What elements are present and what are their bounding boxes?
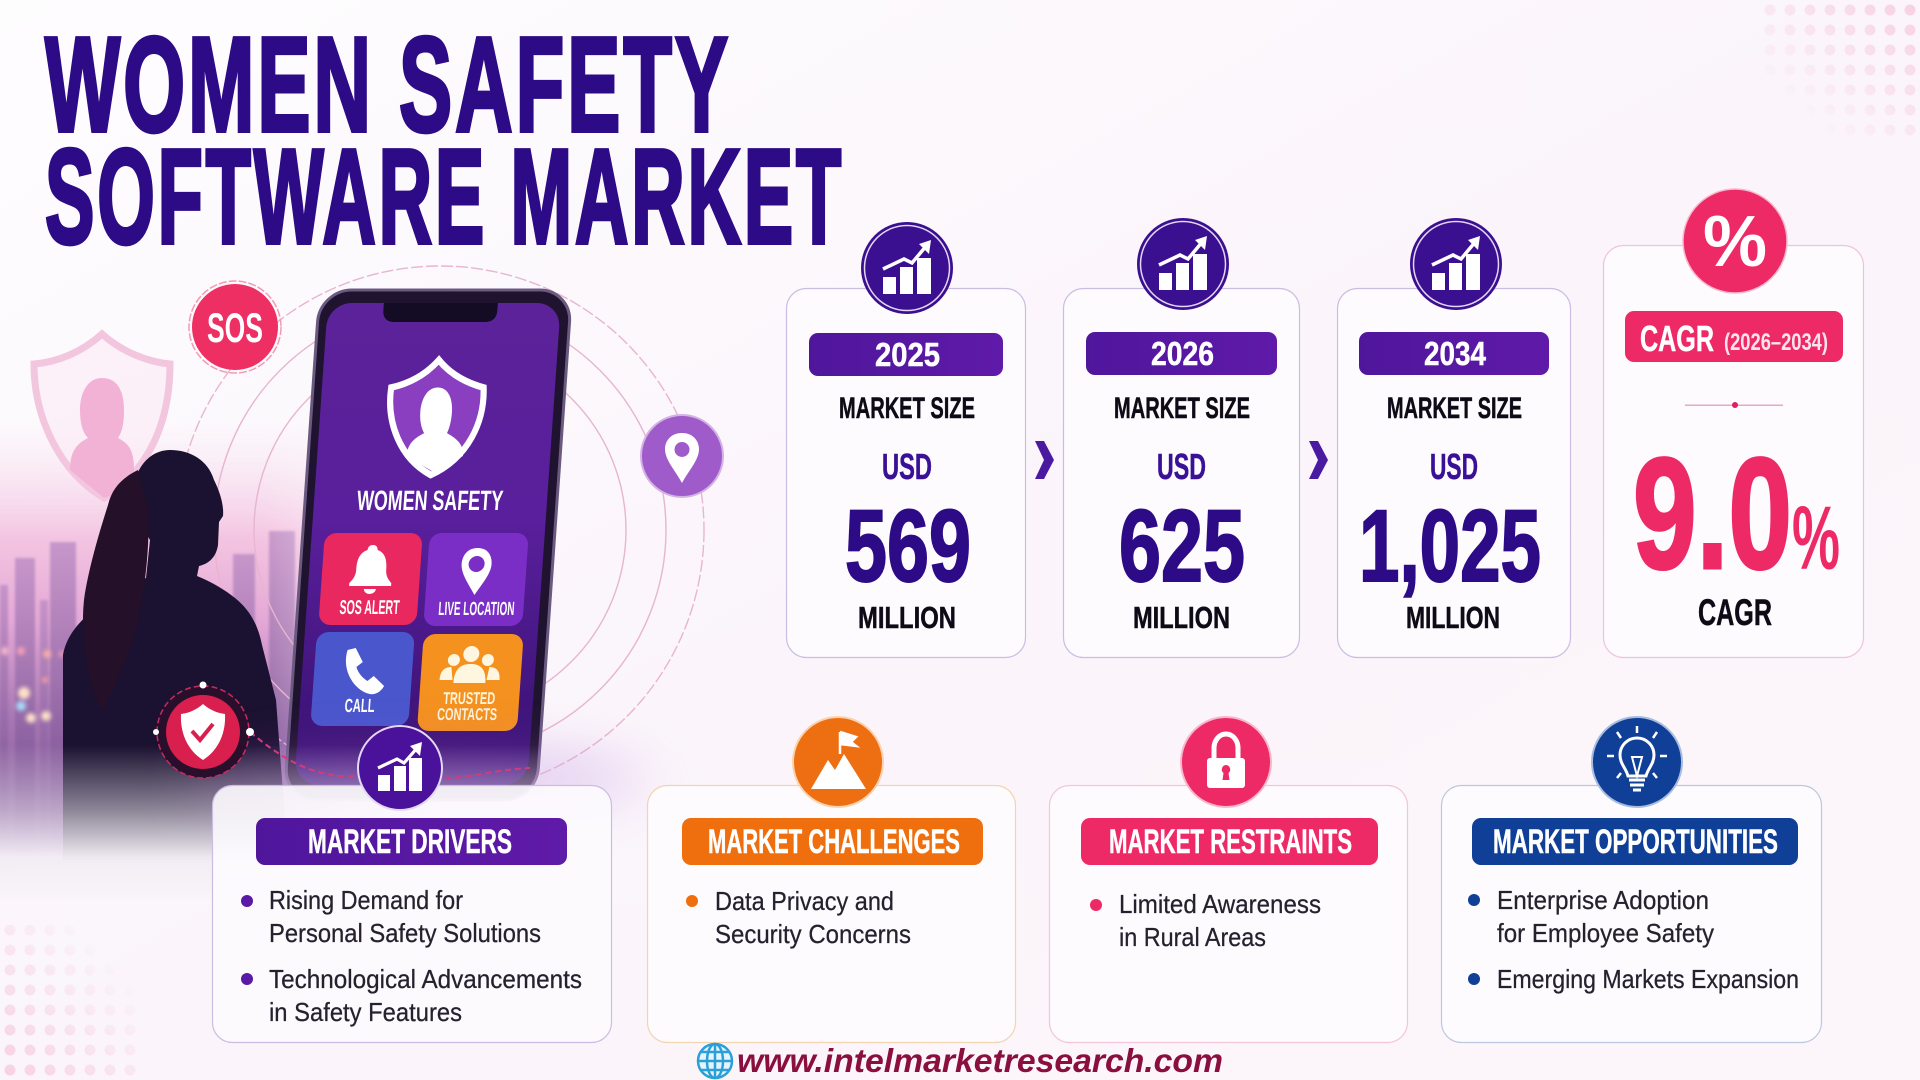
- icon: SOS badge: SOS: [207, 304, 263, 351]
- bullet 1: for Employee Safety: [1497, 918, 1714, 948]
- tile: call: [310, 632, 415, 726]
- bullet 1: Rising Demand for: [269, 885, 463, 915]
- panel: market size 2034: [1338, 218, 1570, 658]
- year pill: [1359, 332, 1549, 375]
- panel: market size 2025: [786, 222, 1026, 658]
- unit: MILLION: [1406, 600, 1500, 635]
- signal rings around phone: [176, 266, 704, 794]
- CAGR period: (2026–2034): [1724, 329, 1828, 356]
- year label: 2025: [875, 336, 940, 373]
- currency: USD: [1157, 446, 1206, 487]
- title: WOMEN SAFETY: [45, 9, 731, 160]
- arrow: [1035, 441, 1054, 479]
- tile: live location: LIVE LOCATION: [438, 599, 515, 620]
- value: 1,025: [1359, 489, 1541, 603]
- phone: [284, 290, 572, 800]
- year pill: [809, 333, 1003, 376]
- icon: growth chart: [1137, 218, 1229, 310]
- panel: CAGR: [1604, 189, 1864, 658]
- heading pill: [1081, 818, 1378, 865]
- bullet 2: Emerging Markets Expansion: [1497, 964, 1799, 994]
- heading: MARKET OPPORTUNITIES: [1493, 823, 1778, 861]
- value: 569: [845, 489, 971, 603]
- tile: trusted contacts: [417, 634, 524, 731]
- tile: trusted contacts: CONTACTS: [436, 705, 498, 724]
- year label: 2034: [1424, 335, 1487, 372]
- arrow: [1309, 441, 1328, 479]
- icon: SOS badge: [189, 281, 281, 373]
- bullet 1: [241, 885, 541, 948]
- icon: location badge: [641, 415, 723, 497]
- metric label: MARKET SIZE: [1114, 392, 1250, 425]
- icon: growth chart: [1410, 218, 1502, 310]
- metric label: MARKET SIZE: [839, 392, 975, 425]
- year label: 2026: [1151, 335, 1214, 372]
- title: SOFTWARE MARKET: [45, 121, 844, 272]
- tile: call: CALL: [344, 696, 376, 717]
- bullet 1: [1468, 885, 1714, 948]
- icon: percent badge: [1683, 189, 1787, 293]
- divider dot: [1685, 402, 1783, 408]
- icon: shield check badge: [153, 682, 254, 778]
- phone notch: [383, 303, 498, 322]
- CAGR pill label: CAGR: [1640, 318, 1714, 359]
- metric label: MARKET SIZE: [1387, 392, 1522, 425]
- icon: growth chart: [861, 222, 953, 314]
- currency: USD: [882, 446, 932, 487]
- corner dots bottom left: [0, 925, 140, 1080]
- percent sign: %: [1792, 489, 1840, 589]
- city lights: [1, 647, 65, 723]
- panel: market challenges: [648, 717, 1016, 1042]
- title: [45, 9, 844, 272]
- phone body: [284, 290, 572, 800]
- icon: light bulb: [1592, 717, 1682, 807]
- tile: live location: [423, 533, 529, 626]
- bullet 2: Technological Advancements: [269, 964, 582, 994]
- bullet 1: Enterprise Adoption: [1497, 885, 1709, 915]
- corner dots top right: [1764, 4, 1916, 136]
- bullet 1: Data Privacy and: [715, 886, 894, 916]
- bullet 1: in Rural Areas: [1119, 922, 1266, 952]
- dotted connector: [250, 732, 530, 778]
- panel: market restraints: [1050, 717, 1408, 1042]
- icon: ghost shield with woman: [34, 334, 170, 498]
- heading: MARKET CHALLENGES: [708, 823, 960, 861]
- heading pill: [682, 818, 983, 865]
- unit: MILLION: [1133, 600, 1230, 635]
- woman silhouette: [63, 450, 288, 860]
- bullet 1: Limited Awareness: [1119, 889, 1321, 919]
- CAGR value: 9.0: [1633, 426, 1792, 602]
- panel: market drivers: [212, 726, 612, 1042]
- bullet 1: [1090, 889, 1321, 952]
- city sky backdrop: [0, 449, 306, 868]
- CAGR label: CAGR: [1698, 592, 1772, 633]
- heading: MARKET RESTRAINTS: [1109, 823, 1352, 861]
- heading pill: [256, 818, 567, 865]
- value: 625: [1119, 489, 1245, 603]
- bullet 1: Security Concerns: [715, 919, 911, 949]
- icon: padlock: [1181, 717, 1271, 807]
- purple glow under phone: [190, 760, 650, 820]
- website footer: www.intelmarketresearch.com: [737, 1042, 1223, 1079]
- bullet 2: [241, 964, 582, 1027]
- tile: SOS alert: SOS ALERT: [339, 597, 401, 619]
- bullet 1: Personal Safety Solutions: [269, 918, 541, 948]
- icon: growth chart: [358, 726, 442, 810]
- panel: market opportunities: [1442, 717, 1822, 1042]
- bullet 1: [686, 886, 911, 949]
- skyline buildings: [0, 530, 296, 786]
- bullet 2: in Safety Features: [269, 997, 462, 1027]
- year pill: [1086, 332, 1277, 375]
- panel: market size 2026: [1064, 218, 1300, 658]
- tile: trusted contacts: TRUSTED: [443, 689, 496, 708]
- icon: screen shield: [385, 360, 486, 475]
- phone screen: [294, 303, 561, 785]
- CAGR pill: [1625, 311, 1843, 362]
- heading pill: [1472, 818, 1798, 865]
- bottom fade: [0, 745, 720, 905]
- phone heading: WOMEN SAFETY: [356, 485, 504, 516]
- heading: MARKET DRIVERS: [308, 823, 512, 861]
- icon: percent badge: %: [1703, 202, 1767, 282]
- unit: MILLION: [858, 600, 956, 635]
- icon: mountain flag: [793, 717, 883, 807]
- tile: SOS alert: [318, 533, 423, 625]
- icon: globe: [698, 1044, 732, 1078]
- currency: USD: [1430, 446, 1478, 487]
